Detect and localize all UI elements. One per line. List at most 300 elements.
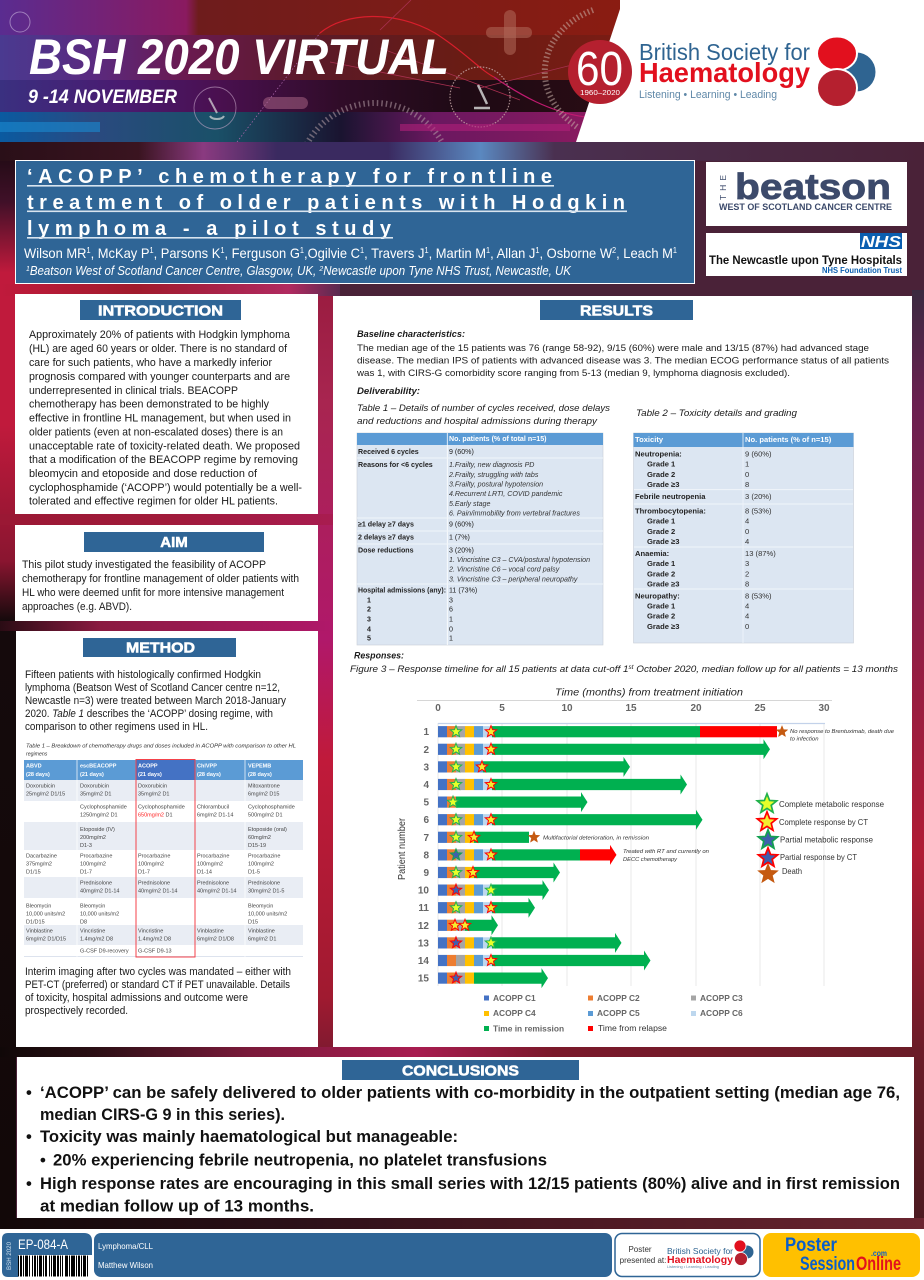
authors: 1	[149, 246, 154, 255]
table 1: cycles and delays: 4.Recurrent LRTI, COVID pandemic	[449, 490, 563, 498]
authors: , Parsons K	[154, 245, 221, 261]
PosterSessionOnline logo: Session	[800, 1254, 855, 1275]
table 1: cycles and delays: 5.Early stage	[449, 500, 490, 508]
logo: Beatson: THE	[718, 175, 728, 200]
table 1: cycles and delays: 2.Frailty, struggling with tabs	[448, 471, 539, 479]
logo: Beatson: WEST OF SCOTLAND CANCER CENTRE	[719, 202, 892, 212]
table 1: cycles and delays: 3.Frailty, postural hypotension	[449, 480, 543, 488]
table 1: cycles and delays: 3	[367, 616, 371, 624]
event title: BSH 2020 VIRTUAL	[29, 29, 449, 85]
chemotherapy regimen table: G-CSF D9-13	[138, 948, 172, 954]
chemotherapy regimen table: Etoposide (IV)	[80, 827, 115, 833]
chemotherapy regimen table: Procarbazine	[248, 854, 280, 860]
chemotherapy regimen table: Prednisolone	[197, 881, 229, 887]
authors: 2	[612, 246, 617, 255]
patient 12 bar	[418, 915, 498, 935]
chart: response timeline	[397, 688, 895, 1034]
patient 1 bar: 1	[423, 727, 429, 738]
table 1: cycles and delays: Hospital admissions (any):	[358, 586, 446, 594]
affiliations: Beatson West of Scotland Cancer Centre, Glasgow, UK,	[30, 264, 319, 278]
patient 7 bar	[423, 831, 650, 844]
time axis: 25	[754, 703, 766, 714]
authors: 1	[535, 246, 540, 255]
chemotherapy regimen table: (21 days)	[138, 772, 162, 778]
table 1: cycles and delays: 2. Vincristine C6 – vocal cord palsy	[448, 566, 560, 574]
patient 5 bar: 5	[423, 798, 429, 809]
table 2: toxicity: Febrile neutropenia	[635, 492, 706, 501]
patient 2 bar	[423, 739, 770, 759]
annotation: patient 8: DECC chemotherapy	[623, 857, 678, 863]
patient 13 bar	[418, 933, 622, 953]
chemotherapy regimen table: ABVD	[26, 764, 42, 770]
logo: Newcastle NHS	[706, 233, 907, 276]
cycle legend: Time from relapse	[598, 1023, 667, 1033]
chemotherapy regimen table: Prednisolone	[248, 881, 280, 887]
chemotherapy regimen table: Cyclophosphamide	[80, 805, 127, 811]
table 1: cycles and delays: Reasons for <6 cycles	[358, 461, 433, 469]
heading: results	[540, 300, 693, 320]
table 2: toxicity: 9 (60%)	[745, 450, 772, 458]
figure 3 caption: Figure 3 – Response timeline for all 15 patients at data cut-off 1	[350, 663, 614, 674]
table 1: cycles and delays: 4	[367, 626, 371, 634]
table 2: toxicity: Grade ≥3	[647, 480, 679, 489]
interim imaging text	[25, 966, 291, 1017]
event dates: 9 -14 NOVEMBER	[28, 87, 177, 108]
table 2: toxicity: 3	[745, 559, 749, 568]
patient 6 bar	[423, 810, 702, 830]
chemotherapy regimen table: 100mg/m2	[138, 862, 164, 868]
interim imaging text: prospectively recorded.	[25, 1005, 128, 1017]
chemotherapy regimen table: Bleomycin	[248, 903, 273, 909]
baseline characteristics: was 1, with CIRS-G comorbidity score ranging from 5-13 (median 9, lymphoma diagnosis excluded).	[356, 367, 790, 378]
introduction text: Approximately 20% of patients with Hodgkin lymphoma	[29, 329, 291, 341]
annotation: patient 8	[623, 849, 710, 863]
conclusion 2	[26, 1127, 547, 1170]
time axis: 10	[561, 703, 573, 714]
table 2: toxicity: Neutropenia:	[635, 450, 682, 458]
time axis: 5	[499, 703, 505, 714]
chemotherapy regimen table: 10,000 units/m2	[80, 911, 119, 917]
patient 10 bar: 10	[418, 886, 429, 897]
introduction text: bleomycin and etoposide and dose reduction of	[29, 468, 258, 480]
patient 5 bar	[423, 792, 588, 812]
table 2: toxicity: Toxicity	[635, 435, 664, 444]
table 2: toxicity: Grade 1	[647, 602, 676, 610]
affiliations: Newcastle upon Tyne NHS Trust, Newcastle, UK	[323, 264, 572, 278]
patient 12 bar: 12	[418, 921, 429, 932]
logo: BSH 60 years: 1960–2020	[580, 90, 620, 97]
annotation: patient 1	[790, 729, 895, 742]
PosterSessionOnline logo: .com	[871, 1249, 887, 1258]
logo: BSH 60 years: Haematology	[639, 57, 810, 88]
table 1: cycles and delays: 0	[449, 626, 453, 634]
table 1: cycles and delays: 6	[449, 606, 453, 614]
chemotherapy regimen table: D15	[248, 919, 258, 925]
baseline characteristics	[356, 328, 889, 378]
chemotherapy regimen table: 10,000 units/m2	[248, 911, 287, 917]
introduction text: tolerated and effective regimen for older HL patients.	[29, 496, 278, 508]
conclusion 1: median CIRS-G 9 in this series).	[40, 1105, 285, 1124]
logo: BSH 60 years: Listening • Learning • Leading	[639, 89, 777, 101]
table 2: toxicity: 8	[745, 580, 749, 588]
table 1: cycles and delays: 6. Pain/immobility from vertebral fractures	[449, 510, 580, 518]
chemotherapy regimen table: G-CSF D9-recovery	[80, 948, 129, 954]
chemotherapy regimen table: 100mg/m2	[197, 862, 223, 868]
heading: conclusions: CONCLUSIONS	[402, 1062, 519, 1080]
table 1: cycles and delays: 1. Vincristine C3 – CVA/postural hypotension	[449, 556, 590, 564]
logo: Beatson: beatson	[735, 166, 891, 207]
patient 8 bar: 8	[423, 850, 429, 861]
poster title	[27, 166, 627, 240]
patient 15 bar	[418, 968, 548, 988]
PosterSessionOnline logo: Poster	[785, 1235, 838, 1256]
chemotherapy regimen table: ACOPP	[138, 764, 158, 770]
table 1 caption: Table 1 – Breakdown of chemotherapy drugs and doses included in ACOPP with comparison to other HL	[26, 744, 296, 750]
chemotherapy regimen table: 500mg/m2 D1	[248, 813, 283, 819]
figure 3 caption: st	[629, 665, 634, 671]
chemotherapy regimen table: D1/15	[26, 870, 41, 876]
PosterSessionOnline logo: Online	[856, 1254, 901, 1275]
chemotherapy regimen table: Doxorubicin	[80, 784, 109, 790]
conclusion 1	[26, 1083, 900, 1124]
logo: BSH 60 years: British Society for	[639, 39, 810, 65]
cycle legend: ACOPP C5	[597, 1008, 640, 1018]
table 1: cycles and delays: Dose reductions	[358, 546, 414, 554]
conclusion 3	[26, 1174, 900, 1216]
chemotherapy regimen table: Mitoxantrone	[248, 784, 280, 790]
poster id block: EP-084-A	[18, 1236, 69, 1252]
table 1: cycles and delays: No. patients (% of total n=15)	[449, 435, 547, 443]
chemotherapy regimen table: Vincristine	[138, 928, 163, 934]
conclusion 3: High response rates are encouraging in this small series with 12/15 patients (80%) alive and in first remission	[40, 1174, 900, 1193]
patient 6 bar: 6	[423, 815, 429, 826]
patient 15 bar: 15	[418, 974, 429, 985]
table 2: toxicity: 13 (87%)	[745, 549, 776, 558]
patient 1 bar	[423, 726, 788, 738]
chemotherapy regimen table: D1-7	[80, 870, 92, 876]
aim text	[22, 559, 299, 613]
introduction text	[29, 329, 302, 508]
introduction text: (HL) are aged 60 years or older. There is no standard of	[29, 343, 288, 355]
authors: , Travers J	[364, 245, 424, 261]
table 2: toxicity: Thrombocytopenia:	[635, 506, 706, 516]
table 2: toxicity: 2	[745, 569, 749, 578]
panel: introduction	[15, 294, 318, 514]
authors: Wilson MR	[24, 245, 92, 261]
chemotherapy regimen table: 40mg/m2 D1-14	[138, 889, 177, 895]
table 1 caption: regimens	[26, 752, 48, 758]
authors: 1	[424, 246, 429, 255]
chemotherapy regimen table: 1.4mg/m2 D8	[80, 936, 113, 942]
chemotherapy regimen table: ChlVPP	[197, 764, 217, 770]
table 1: cycles and delays	[357, 433, 603, 645]
introduction text: prognosis compared with younger counterparts and are	[29, 371, 290, 383]
conclusion 1: ‘ACOPP’ can be safely delivered to older patients with co-morbidity in the outpatient setting (median age 76,	[40, 1083, 900, 1102]
logo: Newcastle NHS: NHS Foundation Trust	[822, 266, 902, 275]
chemotherapy regimen table: 6mg/m2 D1	[248, 936, 276, 942]
table 2: toxicity: Grade 2	[647, 470, 675, 479]
time axis: 0	[435, 703, 441, 714]
table 1: cycles and delays: 11 (73%)	[449, 586, 477, 594]
cycle legend: ACOPP C1	[493, 993, 536, 1003]
chemotherapy regimen table: 6mg/m2 D15	[248, 792, 280, 798]
patient 11 bar: 11	[418, 903, 429, 914]
chemotherapy regimen table: Vincristine	[80, 928, 105, 934]
authors: , Allan J	[490, 245, 535, 261]
table 2: toxicity: 4	[745, 537, 749, 546]
PosterSessionOnline logo	[763, 1233, 920, 1277]
introduction text: cyclophosphamide (‘ACOPP’) would potentially be a well-	[29, 482, 302, 494]
table 1: cycles and delays: Received 6 cycles	[358, 448, 419, 456]
chemotherapy regimen table: 40mg/m2 D1-14	[197, 889, 236, 895]
table 1: cycles and delays: 1	[449, 635, 453, 643]
chemotherapy regimen table: Bleomycin	[80, 903, 105, 909]
heading: aim: AIM	[160, 534, 188, 551]
baseline characteristics: disease. The median IPS of patients with advanced disease was 3. The median ECOG performance status of all patients	[357, 354, 889, 366]
table 1 title: Table 1 – Details of number of cycles received, dose delays	[357, 402, 610, 413]
presented at BSH	[615, 1234, 760, 1276]
presented at BSH: presented at:	[620, 1256, 666, 1265]
conclusion 2: •	[40, 1150, 46, 1170]
star legend: Death	[782, 866, 802, 876]
table 1: cycles and delays: 3	[449, 596, 453, 604]
table 2: toxicity: 4	[745, 612, 749, 621]
table 2: toxicity: 8 (53%)	[745, 591, 772, 600]
chemotherapy regimen table: 60mg/m2	[248, 835, 271, 841]
authors: 1	[673, 246, 678, 255]
introduction text: effective in frontline HL management, but when used in	[29, 412, 291, 424]
heading: introduction	[80, 300, 241, 320]
table 2: toxicity: Grade 2	[647, 612, 675, 621]
table 2: toxicity: 1	[745, 460, 749, 469]
method text	[25, 669, 286, 733]
patient 3 bar	[423, 757, 630, 777]
chemotherapy regimen table: Bleomycin	[26, 903, 51, 909]
patient 13 bar: 13	[418, 938, 429, 949]
interim imaging text: PET-CT (preferred) or standard CT if PET unavailable. Details	[25, 979, 290, 991]
chemotherapy regimen table: (21 days)	[80, 772, 104, 778]
chemotherapy regimen table: Vinblastine	[26, 928, 53, 934]
chemotherapy regimen table: 375mg/m2	[26, 862, 52, 868]
table 1: cycles and delays: 1 (7%)	[449, 534, 470, 542]
table 1: cycles and delays: 3. Vincristine C3 – peripheral neuropathy	[449, 576, 578, 584]
figure 3 caption: October 2020, median follow up for all patients = 13 months	[633, 663, 898, 674]
chemotherapy regimen table: Prednisolone	[138, 881, 170, 887]
time axis: 15	[625, 703, 637, 714]
method text: Newcastle n=3) were treated between March 2018-January	[25, 695, 286, 707]
table 2: toxicity: 0	[745, 527, 749, 536]
patient 10 bar	[418, 880, 549, 900]
chemotherapy regimen table: Dacarbazine	[26, 854, 57, 860]
patient 9 bar: 9	[423, 868, 429, 879]
authors: ,Ogilvie C	[304, 245, 360, 261]
table 1 title: and reductions and hospital admissions during therapy	[357, 415, 598, 426]
annotation: patient 1: No response to Brentuximab, death due	[790, 729, 895, 735]
chemotherapy regimen table: Etoposide (oral)	[248, 827, 287, 833]
introduction text: underrepresented in clinical trials. BEACOPP	[29, 385, 238, 397]
heading: method	[83, 638, 236, 657]
patient 14 bar	[418, 950, 650, 970]
table 2: toxicity: Grade 1	[647, 559, 676, 568]
chemotherapy regimen table: 40mg/m2 D1-14	[80, 889, 119, 895]
annotation: patient 8: Treated with RT and currently on	[623, 849, 710, 855]
chemotherapy regimen table: VEPEMB	[248, 764, 271, 770]
authors: , McKay P	[91, 245, 149, 261]
aim text: chemotherapy for frontline management of older patients with	[22, 573, 299, 585]
table 1: cycles and delays: 9 (60%)	[449, 520, 474, 528]
conclusion 1: •	[26, 1083, 32, 1102]
cycle legend: ACOPP C2	[597, 993, 640, 1003]
authors: , Martin M	[429, 245, 486, 261]
table 2: toxicity: 0	[745, 622, 749, 631]
cycle legend: ACOPP C6	[700, 1008, 743, 1018]
patient 11 bar	[418, 898, 535, 918]
authors: , Osborne W	[539, 245, 613, 261]
presented at BSH: Listening • Learning • Leading	[667, 1265, 719, 1269]
deliverability heading: Deliverability:	[357, 385, 420, 396]
category and author: Matthew Wilson	[98, 1260, 153, 1270]
cycle legend	[484, 993, 743, 1034]
chemotherapy regimen table: Doxorubicin	[138, 784, 167, 790]
introduction text: care for such patients, who have a markedly inferior	[29, 357, 272, 369]
table 2 title: Table 2 – Toxicity details and grading	[636, 407, 798, 418]
chemotherapy regimen table: D15-19	[248, 843, 266, 849]
chemotherapy regimen table: D1-14	[197, 870, 212, 876]
chemotherapy regimen table: 100mg/m2	[248, 862, 274, 868]
logo: Newcastle NHS: NHS	[861, 234, 901, 251]
poster id block: BSH 2020	[7, 1241, 13, 1270]
chemotherapy regimen table: Vinblastine	[197, 928, 224, 934]
method text: 2020. Table 1 describes the ‘ACOPP’ dosing regime, with	[25, 708, 273, 720]
baseline characteristics: Baseline characteristics:	[357, 328, 465, 339]
authors: 1	[486, 246, 491, 255]
table 2: toxicity: 0	[745, 470, 749, 479]
cycle legend: Time in remission	[493, 1024, 564, 1034]
footer	[0, 1229, 924, 1280]
aim text: This pilot study investigated the feasibility of ACOPP	[22, 559, 266, 571]
time axis: 20	[690, 703, 702, 714]
table 2: toxicity: Grade 1	[647, 460, 676, 469]
cycle legend: ACOPP C4	[493, 1008, 536, 1018]
introduction text: older patients (even at non-escalated doses) there is an	[29, 426, 283, 438]
table 1: cycles and delays: 5	[367, 635, 371, 643]
category and author: Lymphoma/CLL	[98, 1241, 153, 1251]
chemotherapy regimen table: 6mg/m2 D1/D15	[26, 936, 66, 942]
logo: BSH 60 years	[568, 36, 876, 107]
method text: comparison to other regimens used in HL.	[25, 721, 208, 733]
conclusion 2: 20% experiencing febrile neutropenia, no platelet transfusions	[53, 1150, 547, 1170]
chemotherapy regimen table: 100mg/m2	[80, 862, 106, 868]
heading: method: METHOD	[126, 640, 195, 656]
patient 7 bar: Multifactorial deterioration, in remission	[543, 835, 650, 841]
chemotherapy regimen table: Procarbazine	[80, 854, 112, 860]
chemotherapy regimen table: 35mg/m2 D1	[80, 792, 112, 798]
chemotherapy regimen table: Cyclophosphamide	[248, 805, 295, 811]
panel: conclusions	[17, 1057, 914, 1218]
star legend: Partial response by CT	[780, 852, 858, 862]
poster title: treatment of older patients with Hodgkin	[27, 192, 625, 214]
affiliations: 2	[318, 264, 324, 273]
chemotherapy regimen table: 25mg/m2 D1/15	[26, 792, 65, 798]
authors: 1	[300, 246, 305, 255]
poster id block	[2, 1233, 92, 1277]
authors: 1	[86, 246, 91, 255]
time axis	[417, 700, 832, 714]
chemotherapy regimen table: Doxorubicin	[26, 784, 55, 790]
interim imaging text: Interim imaging after two cycles was mandated – either with	[25, 966, 291, 978]
conclusion 3: at median follow up of 13 months.	[40, 1196, 314, 1216]
chemotherapy regimen table: Procarbazine	[138, 854, 170, 860]
patient 4 bar: 4	[423, 780, 429, 791]
authors: , Leach M	[616, 245, 673, 261]
table 2: toxicity: Anaemia:	[635, 549, 669, 558]
category and author	[94, 1233, 612, 1277]
heading: introduction: INTRODUCTION	[98, 302, 223, 320]
time axis: 30	[818, 703, 830, 714]
table 1: cycles and delays: 1	[449, 616, 453, 624]
banner	[0, 0, 876, 142]
patient 2 bar: 2	[423, 745, 429, 756]
chemotherapy regimen table	[24, 760, 303, 957]
chart title: Time (months) from treatment initiation	[555, 688, 743, 698]
table 1: cycles and delays: 1	[367, 596, 371, 604]
table 2: toxicity: Neuropathy:	[635, 591, 680, 600]
chemotherapy regimen table: 1250mg/m2 D1	[80, 813, 118, 819]
star legend	[757, 794, 884, 882]
poster title: lymphoma - a pilot study	[27, 218, 392, 240]
table 2: toxicity: No. patients (% of n=15)	[745, 435, 832, 444]
patient 4 bar	[423, 774, 687, 794]
chemotherapy regimen table: (28 days)	[248, 772, 272, 778]
chemotherapy regimen table: 10,000 units/m2	[26, 911, 65, 917]
chemotherapy regimen table: 650mg/m2	[138, 813, 164, 819]
table 2: toxicity	[634, 433, 854, 643]
chemotherapy regimen table: D1/D15	[26, 919, 45, 925]
panel: results	[333, 296, 912, 1047]
aim text: approaches (e.g. ABVD).	[22, 601, 132, 613]
presented at BSH: Haematology	[667, 1254, 733, 1266]
cycle legend: ACOPP C3	[700, 993, 743, 1003]
method text: Fifteen patients with histologically confirmed Hodgkin	[25, 669, 261, 681]
heading: aim	[84, 532, 264, 552]
chemotherapy regimen table: Procarbazine	[197, 854, 229, 860]
chemotherapy regimen table: 6mg/m2 D1-14	[197, 813, 233, 819]
introduction text: chemotherapy has been demonstrated to be highly	[29, 398, 270, 410]
chemotherapy regimen table: 6mg/m2 D1/D8	[197, 936, 234, 942]
chemotherapy regimen table: Cyclophosphamide	[138, 805, 185, 811]
table 1 caption	[26, 744, 296, 758]
authors: 1	[220, 246, 225, 255]
presented at BSH: Poster	[628, 1245, 652, 1254]
affiliations: 1	[26, 264, 30, 273]
patient 7 bar: 7	[423, 833, 429, 844]
table 2: toxicity: Grade ≥3	[647, 580, 679, 588]
chemotherapy regimen table: D1-7	[138, 870, 150, 876]
table 1: cycles and delays: 1.Frailty, new diagnosis PD	[449, 461, 534, 469]
chemotherapy regimen table: escBEACOPP	[80, 764, 116, 770]
star legend: Complete metabolic response	[779, 799, 884, 809]
introduction text: that a modification of the BEACOPP regime by removing	[29, 454, 298, 466]
table 2: toxicity: Grade 2	[647, 527, 675, 536]
table 1: cycles and delays: 2 delays ≥7 days	[358, 534, 414, 542]
table 1: cycles and delays: 9 (60%)	[449, 448, 474, 456]
chemotherapy regimen table: Prednisolone	[80, 881, 112, 887]
logo: BSH 60 years: 60	[576, 43, 623, 96]
table 2: toxicity: Grade ≥3	[647, 537, 679, 546]
heading: results: RESULTS	[580, 302, 653, 320]
chemotherapy regimen table: D1-5	[248, 870, 260, 876]
table 2: toxicity: Grade ≥3	[647, 622, 679, 631]
